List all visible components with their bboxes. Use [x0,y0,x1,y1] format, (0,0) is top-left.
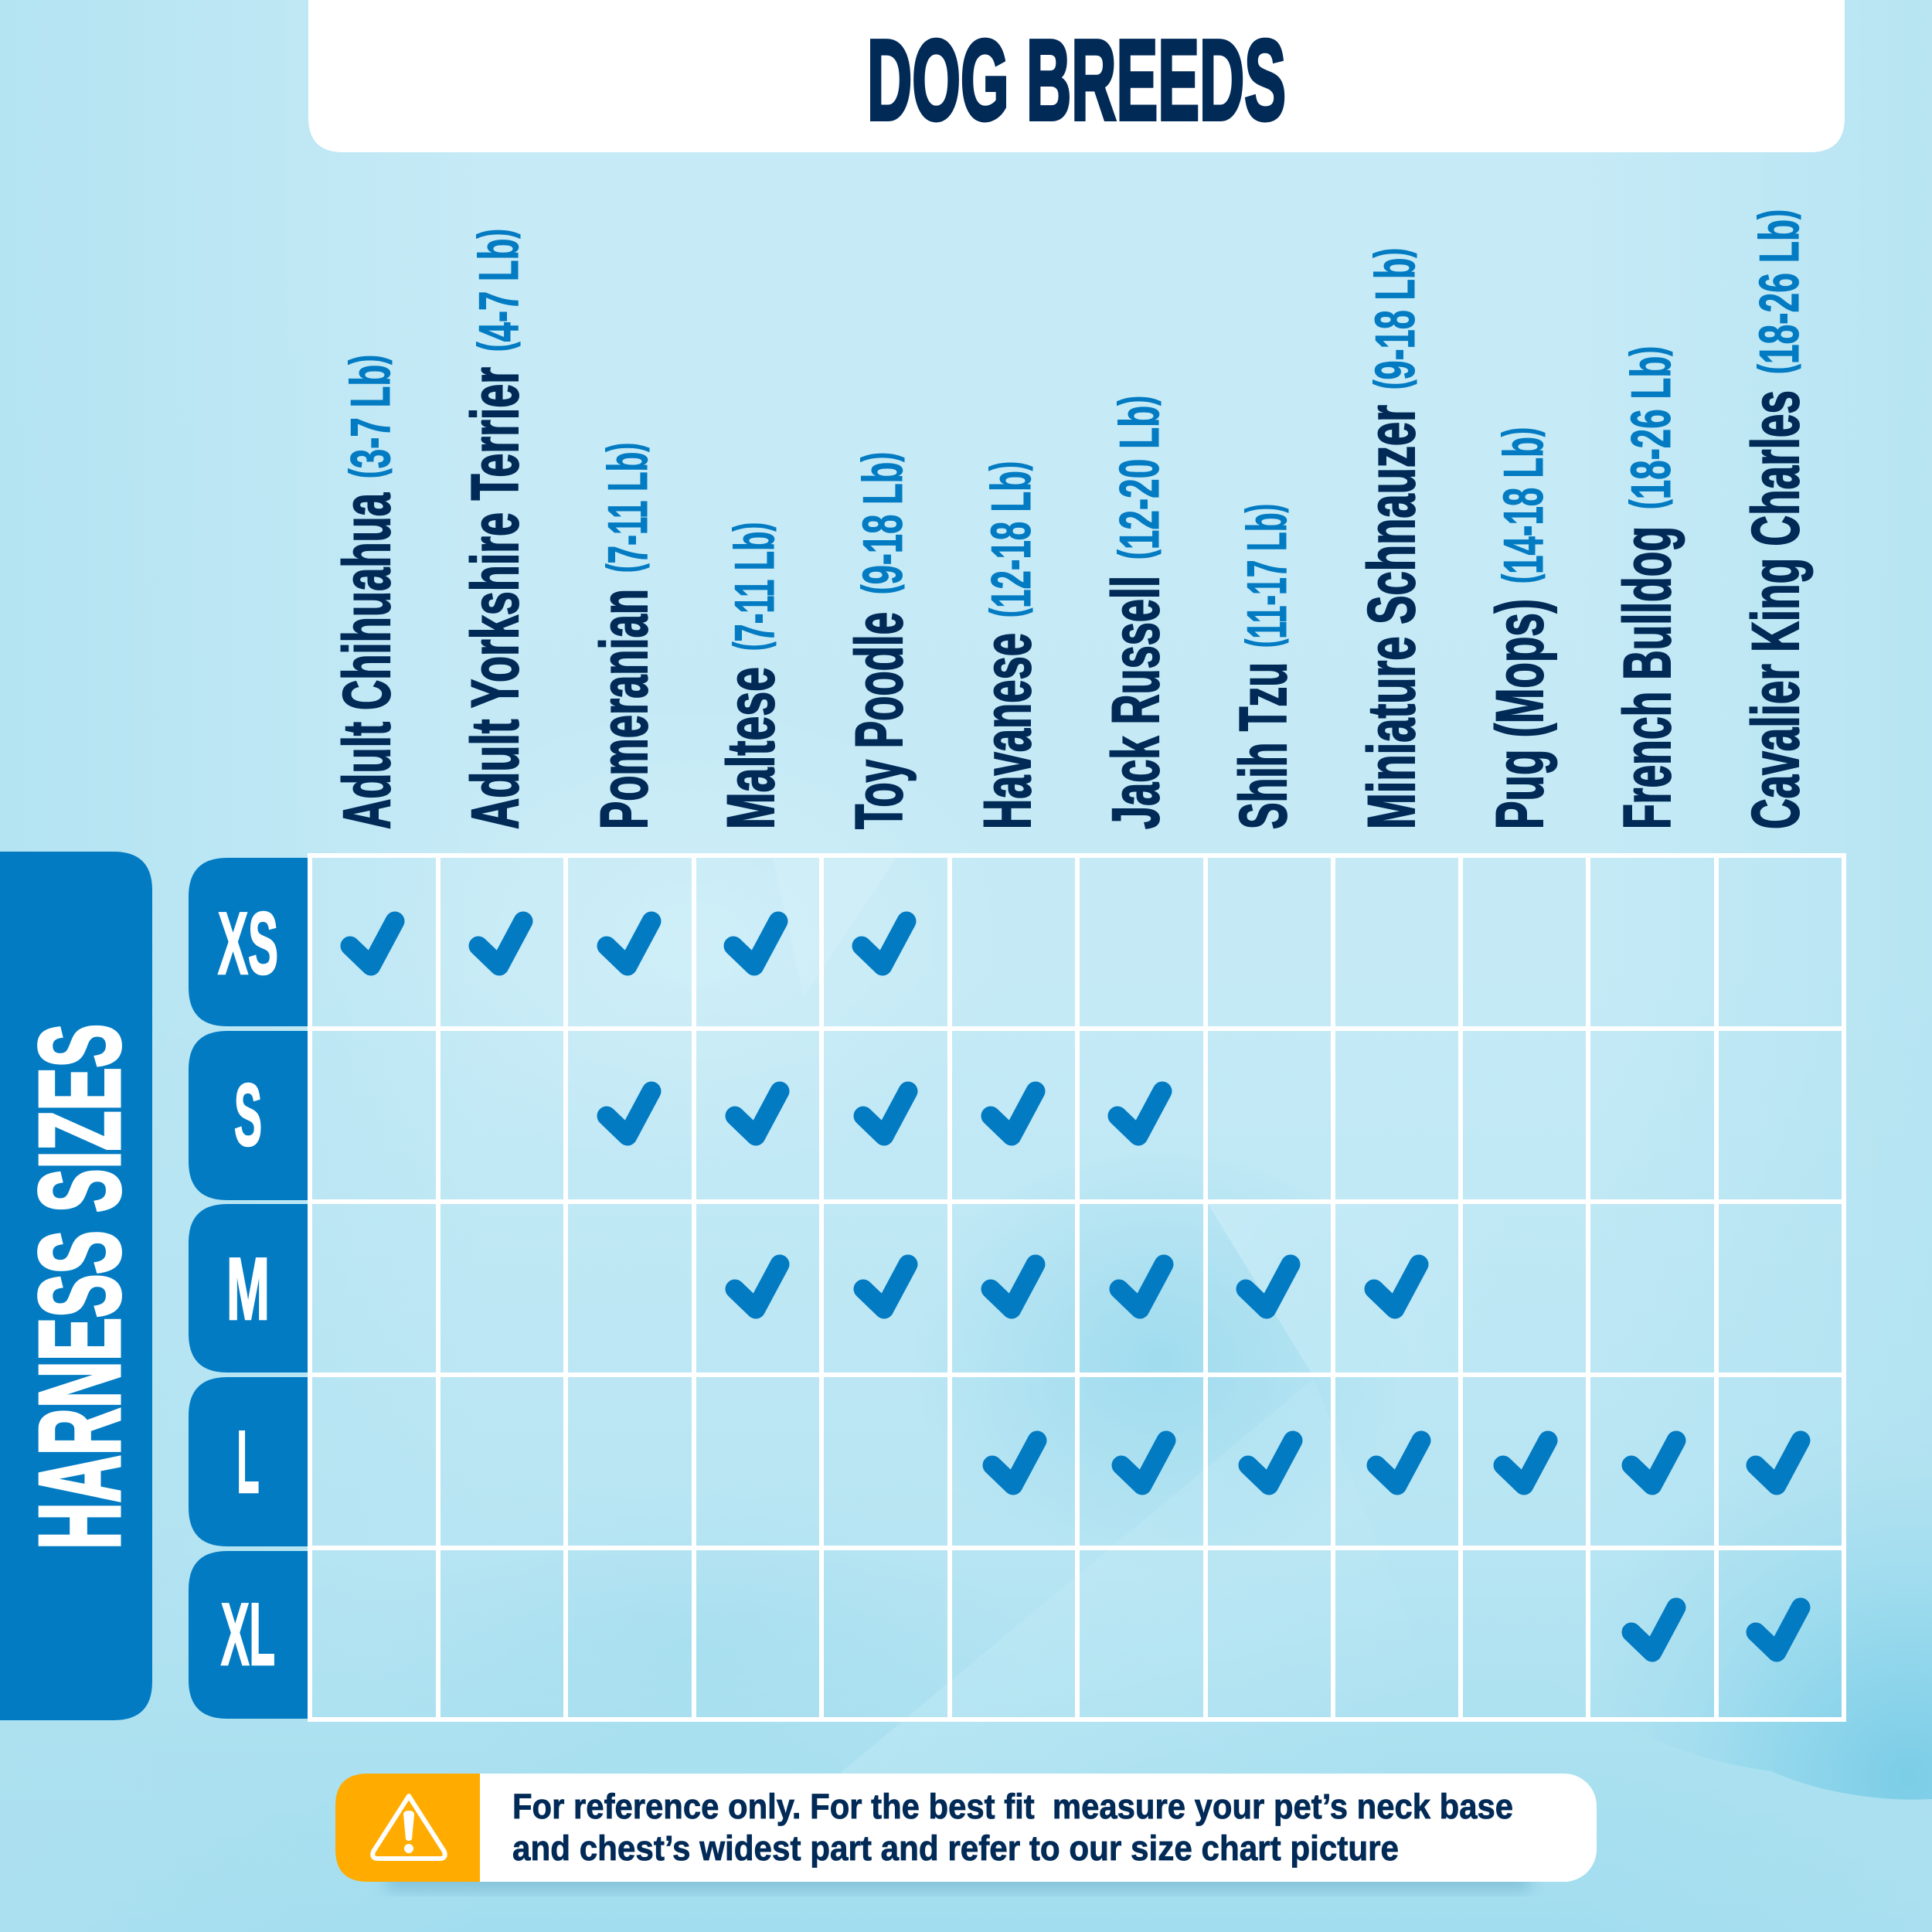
icon: check XS Adult Chihuahua [350,921,395,966]
breed: Adult Yorkshire Terrier: 4-7 Lb [468,239,530,342]
breed: Toy Poodle: ( [853,584,904,594]
breed: Shih Tzu: 11-17 Lb [1236,512,1298,639]
breed: Shih Tzu: Shih Tzu [1226,662,1301,829]
breed: French Bulldog: French Bulldog [1611,526,1685,829]
breed: French Bulldog: 18-26 Lb [1621,356,1682,499]
grid [308,853,1846,1722]
title: DOG BREEDS [867,17,1286,144]
icon: check L Pug [1503,1440,1548,1485]
breed: Pug (Mops): ) [1493,427,1546,437]
icon: check S Havanese [991,1091,1036,1136]
breed: Jack Russell: ( [1110,549,1161,560]
breed: Shih Tzu: ( [1236,639,1289,648]
icon: check XS Maltese [733,921,778,966]
breed: Adult Yorkshire Terrier: ( [468,342,521,352]
icon: check L Shih Tzu [1248,1440,1293,1485]
note text: and chest’s widest part and refer to our size chart picture [512,1828,1399,1868]
icon: check XS Toy Poodle [862,921,906,966]
icon: check XL French Bulldog [1631,1607,1676,1652]
icon: check M Shih Tzu [1246,1264,1291,1309]
breed column headings [330,209,1813,829]
checkmarks [350,921,1801,1652]
breed: Jack Russell: Jack Russell [1099,576,1173,829]
breed: Adult Chihuahua: Adult Chihuahua [330,492,404,829]
breed: Maltese: ( [725,641,776,651]
breed: Cavalier King Charles: ( [1750,364,1801,374]
breed: Havanese: ) [981,461,1032,471]
size: M: M [226,1240,270,1338]
size: S [189,1031,308,1200]
breed: French Bulldog: ) [1621,346,1672,356]
breed: Cavalier King Charles: 18-26 Lb [1749,219,1811,364]
breed: Jack Russell: ) [1110,396,1161,406]
icon: check S Toy Poodle [863,1091,908,1136]
icon: check S Pomeranian [607,1091,651,1136]
breed: Pomeranian: ) [598,443,649,452]
panel: harness sizes [0,852,152,1720]
breed: Cavalier King Charles: ) [1750,209,1801,219]
size: XL: XL [221,1586,275,1684]
breed: Cavalier King Charles: Cavalier King Charles [1739,390,1813,829]
note text: For reference only. For the best fit measure your pet’s neck base [512,1787,1513,1826]
size: L [189,1377,308,1546]
breed: Pomeranian: ( [598,563,649,573]
icon: check L Havanese [992,1440,1037,1485]
size: M [189,1204,308,1372]
icon: check XL Cavalier King Charles [1756,1607,1801,1652]
breed: Miniature Schnauzer: 9-18 Lb [1365,258,1427,379]
size: XL [189,1551,308,1719]
heading: harness sizes: HARNESS SIZES [16,1024,144,1549]
breed: Adult Chihuahua: ( [340,468,393,478]
breed: Miniature Schnauzer: ( [1365,379,1417,389]
breed: Adult Chihuahua: 3-7 Lb [340,365,402,468]
icon: check XS Adult Yorkshire Terrier [478,921,523,966]
icon: check M Maltese [735,1264,780,1309]
icon: check M Havanese [991,1264,1036,1309]
icon: check L Miniature Schnauzer [1376,1440,1421,1485]
breed: Adult Yorkshire Terrier: Adult Yorkshire Terrier [458,367,532,829]
size: XS [189,858,308,1026]
icon: check M Toy Poodle [863,1264,908,1309]
breed: Maltese: Maltese [714,667,788,829]
breed: Maltese: 7-11 Lb [724,532,786,641]
icon: check S Jack Russell [1117,1091,1162,1136]
icon: check L Jack Russell [1121,1440,1166,1485]
breed: Toy Poodle: Toy Poodle [842,612,917,829]
breed: Pomeranian: Pomeranian [587,589,662,829]
header panel [308,0,1845,152]
breed: Havanese: ( [981,608,1032,617]
breed: Adult Yorkshire Terrier: ) [468,229,521,239]
callout: reference note [335,1774,1597,1890]
icon: check XS Pomeranian [607,921,651,966]
breed: Havanese: Havanese [971,633,1045,829]
icon: check M Jack Russell [1119,1264,1164,1309]
size: XS: XS [218,895,278,993]
icon: warning triangle [372,1796,445,1859]
breed: Shih Tzu: ) [1236,504,1289,512]
breed: Maltese: ) [725,522,776,532]
breed: Pomeranian: 7-11 Lb [597,452,659,563]
breed: Miniature Schnauzer: ) [1365,248,1417,258]
breed: Pug (Mops): Pug (Mops) [1483,599,1557,829]
size: L: L [236,1413,260,1512]
breed: Havanese: 12-18 Lb [981,471,1043,608]
size labels [189,858,308,1719]
breed: Pug (Mops): 14-18 Lb [1493,437,1555,574]
icon: check M Miniature Schnauzer [1374,1264,1419,1309]
breed: Miniature Schnauzer: Miniature Schnauzer [1355,405,1429,829]
size: S: S [234,1066,262,1165]
breed: Jack Russell: 12-20 Lb [1109,406,1171,549]
note text [512,1787,1513,1868]
breed: Toy Poodle: ) [853,452,904,462]
breed: Pug (Mops): ( [1493,574,1546,583]
breed: Adult Chihuahua: ) [340,355,393,365]
breed: French Bulldog: ( [1621,499,1672,509]
icon: check S Maltese [735,1091,780,1136]
icon: check L Cavalier King Charles [1756,1440,1801,1485]
icon: check L French Bulldog [1631,1440,1676,1485]
breed: Toy Poodle: 9-18 Lb [852,462,914,584]
